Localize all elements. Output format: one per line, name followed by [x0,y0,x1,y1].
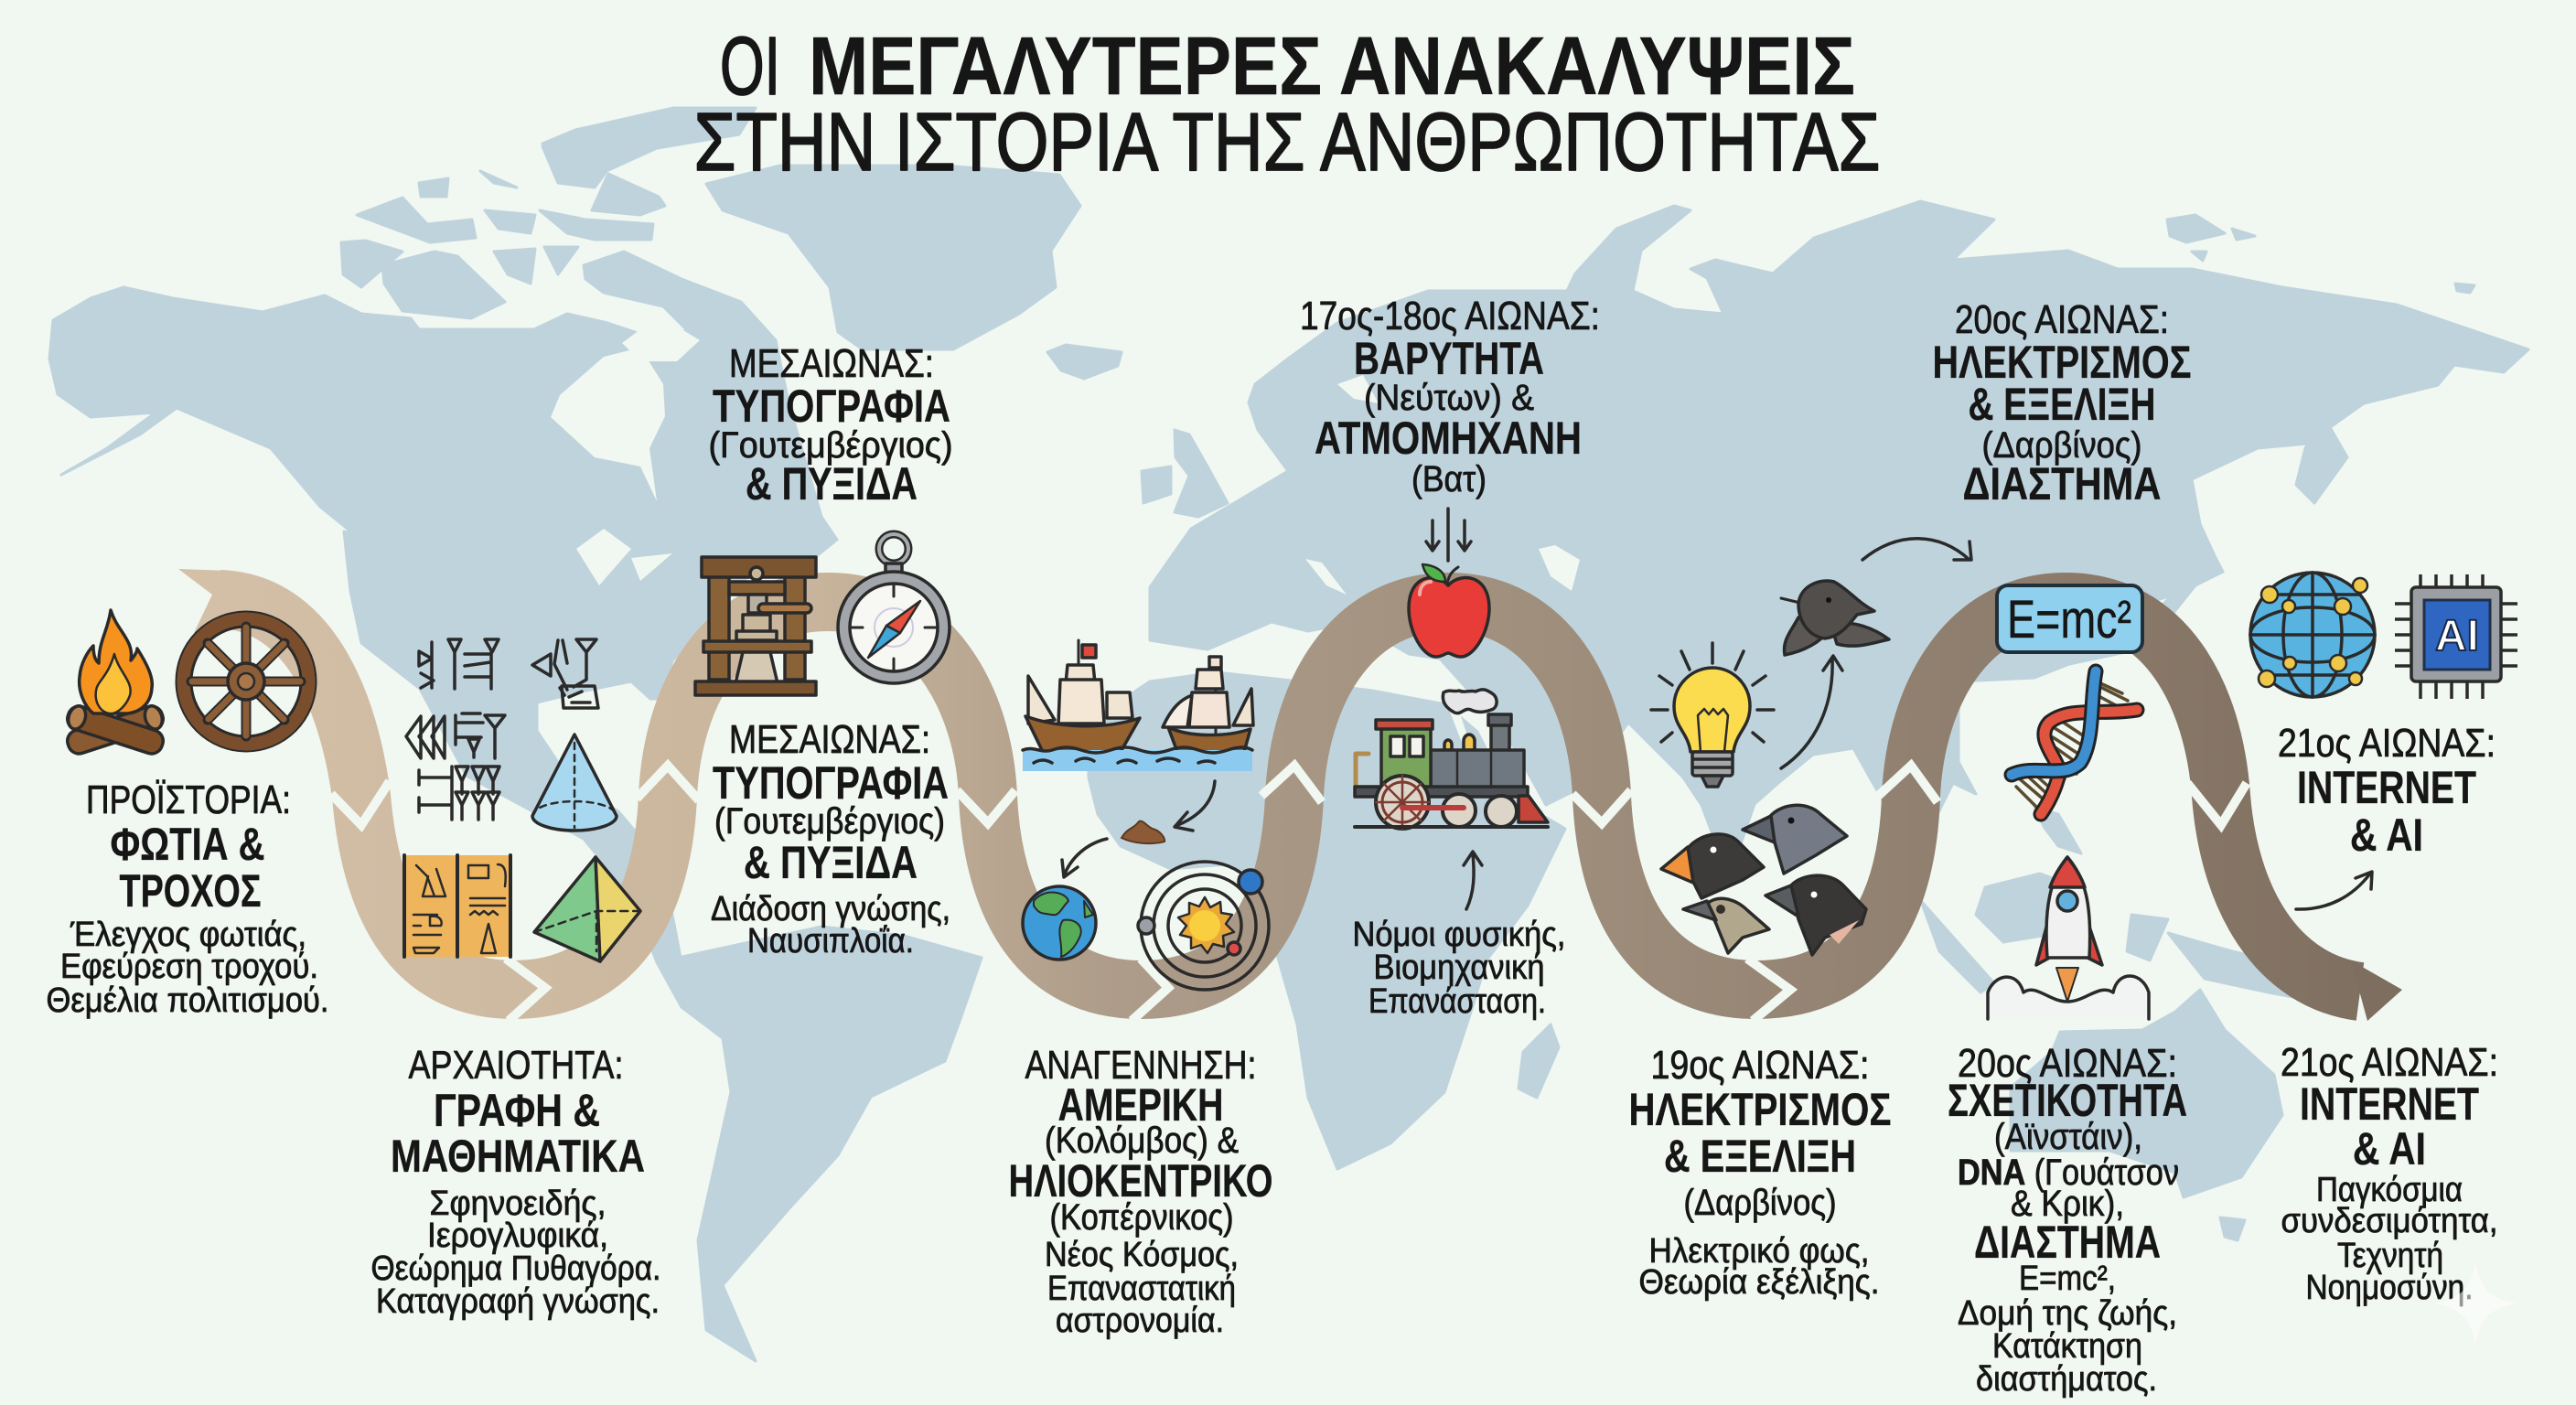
label: middle ages upper [708,341,953,509]
label: renaissance: ΑΜΕΡΙΚΗ [1057,1079,1224,1131]
label: middle ages upper: & ΠΥΞΙΔΑ [746,458,918,509]
label: 17th-18th century results: Επανάσταση. [1368,982,1546,1021]
label: prehistory: ΤΡΟΧΟΣ [119,865,262,917]
icon: campfire [65,610,166,756]
icon: flying finch [1781,581,1889,655]
label: 20th century upper [1932,297,2192,509]
label: 21st century lower: & AI [2353,1123,2426,1174]
label: middle ages upper: ΜΕΣΑΙΩΝΑΣ: [729,341,934,386]
label: antiquity: Θεώρημα Πυθαγόρα. [371,1249,660,1288]
label: middle ages lower: Ναυσιπλοΐα. [747,922,914,960]
label: 21st century lower: INTERNET [2300,1078,2479,1130]
label: 19th century: 19ος ΑΙΩΝΑΣ: [1650,1043,1870,1088]
label: 21st century lower: συνδεσιμότητα, [2281,1202,2497,1240]
label: middle ages lower: ΜΕΣΑΙΩΝΑΣ: [729,717,930,762]
icon: heliocentric system [1138,862,1269,990]
label: 21st century lower: Νοημοσύνη. [2305,1269,2474,1307]
label: 21st century upper: & AI [2350,810,2423,861]
arrow: internet [2296,872,2372,909]
icon: earth [1023,886,1096,960]
label: antiquity: ΑΡΧΑΙΟΤΗΤΑ: [408,1043,624,1088]
icon: finches [1661,805,1866,955]
label: middle ages lower: & ΠΥΞΙΔΑ [744,837,918,888]
label: prehistory: ΦΩΤΙΑ & [110,819,265,870]
label: middle ages lower: Διάδοση γνώσης, [711,890,950,928]
label: 17th-18th century results [1352,916,1566,1021]
title: ΟΙ [720,21,780,113]
label: prehistory: Εφεύρεση τροχού. [60,948,318,986]
label: renaissance: (Κολόμβος) & [1045,1121,1239,1161]
label: renaissance: ΗΛΙΟΚΕΝΤΡΙΚΟ [1008,1155,1273,1207]
label: renaissance: (Κοπέρνικος) [1050,1197,1233,1238]
icon: steam locomotive [1355,690,1548,829]
title [693,21,1881,188]
label: 21st century lower: 21ος ΑΙΩΝΑΣ: [2281,1040,2498,1085]
label: 20th century lower: (Αϊνστάιν), [1994,1117,2142,1157]
arrow: bird to E=mc2 [1862,539,1971,560]
label: 17th-18th century: (Νεύτων) & [1364,378,1534,418]
label: 21st century lower: Παγκόσμια [2316,1171,2463,1209]
label: 19th century: Θεωρία εξέλιξης. [1639,1263,1879,1302]
arrow: land to earth [1062,839,1107,877]
icon: cuneiform script [406,639,598,820]
label: 17th-18th century [1300,294,1600,499]
label: 19th century: ΗΛΕΚΤΡΙΣΜΟΣ [1628,1084,1892,1135]
icon: cone [532,735,617,831]
icon: sparkle watermark [2433,1260,2517,1346]
label: 21st century upper [2278,721,2496,861]
label: middle ages lower: (Γουτεμβέργιος) [714,801,945,842]
icon: AI chip [2395,574,2517,699]
label: 17th-18th century: 17ος-18ος ΑΙΩΝΑΣ: [1300,294,1600,338]
icon: new land [1122,821,1165,843]
icon: rocket launch [1988,857,2149,1019]
icon: printing press [695,557,816,695]
label: prehistory: Έλεγχος φωτιάς, [70,916,306,954]
label: middle ages upper: ΤΥΠΟΓΡΑΦΙΑ [713,381,950,432]
arrow: laws of physics to train [1464,852,1482,909]
label: antiquity [371,1043,660,1321]
label: 20th century upper: ΗΛΕΚΤΡΙΣΜΟΣ [1932,337,2192,388]
label: renaissance: αστρονομία. [1056,1302,1224,1340]
label: 20th century lower [1948,1041,2187,1399]
label: 20th century lower: E=mc², [2019,1260,2116,1298]
label: 21st century lower: Τεχνητή [2337,1237,2443,1275]
label: prehistory: Θεμέλια πολιτισμού. [46,981,329,1020]
label: antiquity: Ιερογλυφικά, [427,1217,608,1255]
label: 20th century lower: DNA (Γουάτσον [1958,1153,2179,1193]
icon: AI chip: AI [2435,612,2479,660]
label: 20th century lower: ΔΙΑΣΤΗΜΑ [1974,1217,2161,1268]
label: middle ages lower [711,717,950,960]
label: renaissance [1008,1043,1273,1340]
label: 19th century: Ηλεκτρικό φως, [1648,1232,1870,1271]
label: antiquity: ΓΡΑΦΗ & [434,1085,600,1136]
label: 20th century lower: & Κρικ), [2011,1184,2124,1224]
title: ΜΕΓΑΛΥΤΕΡΕΣ ΑΝΑΚΑΛΥΨΕΙΣ [809,21,1855,113]
label: 20th century upper: ΔΙΑΣΤΗΜΑ [1963,458,2161,509]
label: 17th-18th century: (Βατ) [1411,459,1487,499]
label: 20th century lower: 20ος ΑΙΩΝΑΣ: [1958,1041,2177,1086]
label: 20th century upper: (Δαρβίνος) [1981,425,2142,466]
label: antiquity: ΜΑΘΗΜΑΤΙΚΑ [391,1131,645,1182]
label: prehistory [46,778,329,1020]
timeline ribbon [178,569,2402,1021]
label: 19th century: (Δαρβίνος) [1683,1183,1837,1223]
arrows: gravity [1426,509,1471,561]
label: renaissance: ΑΝΑΓΕΝΝΗΣΗ: [1025,1043,1257,1088]
icon: E=mc2 badge: E=mc² [2007,590,2131,649]
title: ΣΤΗΝ ΙΣΤΟΡΙΑ ΤΗΣ ΑΝΘΡΩΠΟΤΗΤΑΣ [693,97,1881,188]
label: 21st century upper: 21ος ΑΙΩΝΑΣ: [2278,721,2496,766]
icon: pyramid [534,857,640,961]
icon: compass [838,534,950,683]
label: middle ages lower: ΤΥΠΟΓΡΑΦΙΑ [713,757,949,809]
label: antiquity: Σφηνοειδής, [430,1185,606,1223]
label: 17th-18th century: ΒΑΡΥΤΗΤΑ [1354,333,1544,384]
label: 20th century upper: 20ος ΑΙΩΝΑΣ: [1955,297,2169,342]
icon: hieroglyphs panel [403,855,510,957]
label: middle ages upper: (Γουτεμβέργιος) [708,425,953,466]
label: 17th-18th century results: Βιομηχανική [1374,949,1544,987]
label: 20th century upper: & ΕΞΕΛΙΞΗ [1969,379,2155,430]
label: prehistory: ΠΡΟΪΣΤΟΡΙΑ: [86,778,291,822]
label: 21st century upper: INTERNET [2297,762,2476,813]
arrow: bulb to bird [1781,656,1842,768]
arrow: ships to land [1175,781,1215,831]
label: renaissance: Επαναστατική [1047,1270,1236,1308]
icon: wooden wheel [177,612,316,751]
icon: light bulb [1651,643,1774,787]
label: 19th century [1628,1043,1892,1302]
label: antiquity: Καταγραφή γνώσης. [376,1282,660,1321]
label: 17th-18th century: ΑΤΜΟΜΗΧΑΝΗ [1315,413,1582,464]
label: 20th century lower: Δομή της ζωής, [1958,1294,2177,1333]
label: renaissance: Νέος Κόσμος, [1045,1236,1239,1274]
label: 20th century lower: διαστήματος. [1976,1360,2157,1399]
label: 21st century lower [2281,1040,2498,1307]
label: 20th century lower: ΣΧΕΤΙΚΟΤΗΤΑ [1948,1075,2187,1126]
icon: network globe [2250,573,2375,697]
label: 20th century lower: Κατάκτηση [1992,1327,2142,1366]
label: 19th century: & ΕΞΕΛΙΞΗ [1664,1131,1856,1182]
icon: apple [1409,564,1489,657]
icon: DNA helix [2012,671,2137,814]
icon: caravel ships [1023,640,1253,771]
label: 17th-18th century results: Νόμοι φυσικής, [1352,916,1566,954]
